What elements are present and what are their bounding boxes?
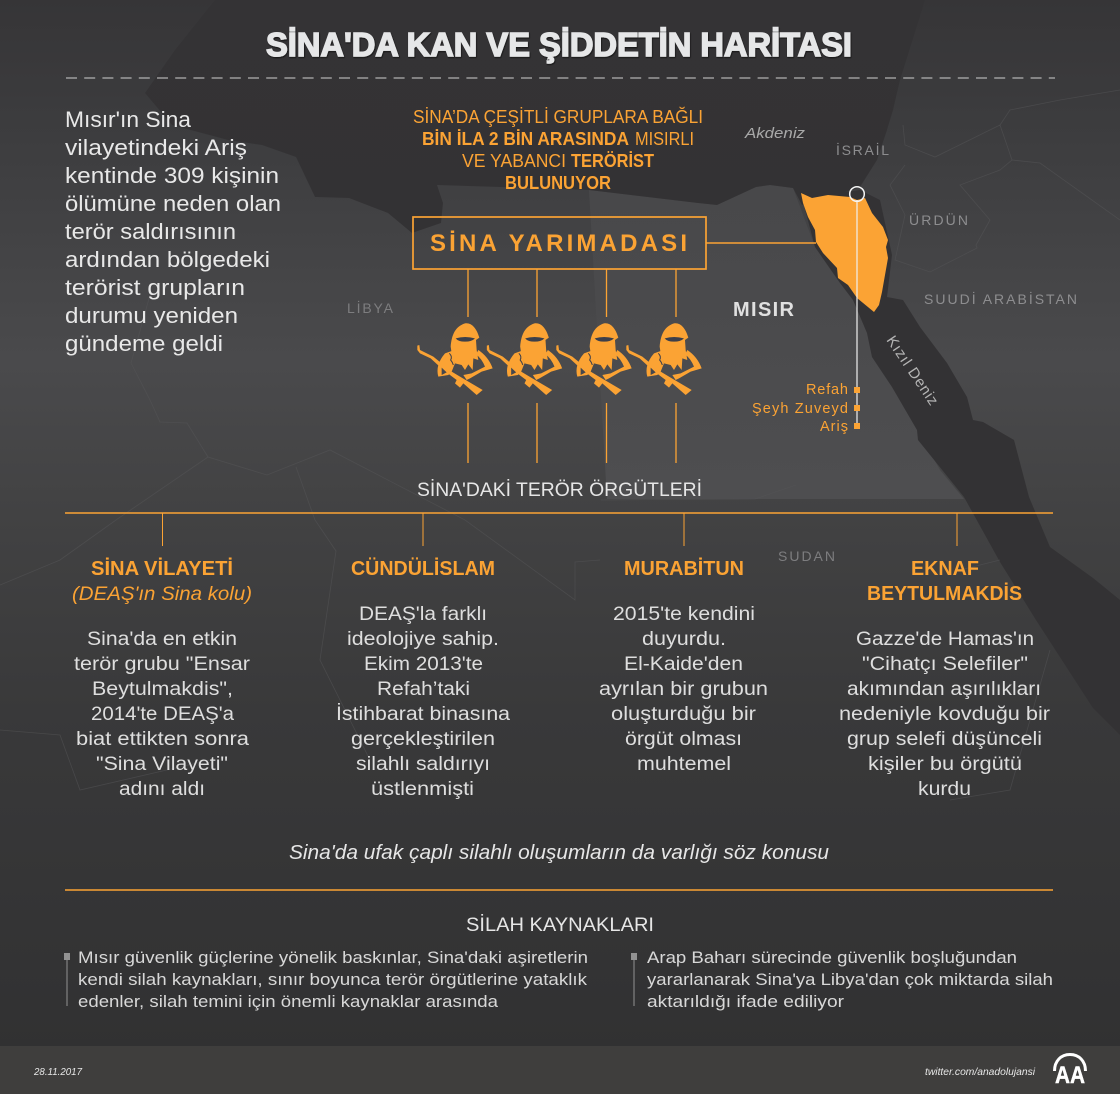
org timeline rule <box>65 513 1053 546</box>
map labels: İSRAİL <box>836 141 889 158</box>
intro paragraph: terörist grupların <box>65 275 245 300</box>
intro paragraph: ardından bölgedeki <box>65 247 270 272</box>
column: Sina Vilayeti: "Sina Vilayeti" <box>96 754 228 775</box>
column: Eknaf Beytulmakdis: nedeniyle kovduğu bir <box>839 704 1051 725</box>
column: Cundulislam <box>336 557 510 800</box>
map labels: SUDAN <box>778 548 835 564</box>
column: Sina Vilayeti: Beytulmakdis", <box>92 679 233 700</box>
column: Eknaf Beytulmakdis: BEYTULMAKDİS <box>867 582 1022 605</box>
column: Murabitun <box>599 557 768 775</box>
column: Murabitun: ayrılan bir grubun <box>599 679 768 700</box>
heading: weapon sources: SİLAH KAYNAKLARI <box>466 915 654 936</box>
column: Eknaf Beytulmakdis: kurdu <box>918 779 971 800</box>
column: Sina Vilayeti: 2014'te DEAŞ'a <box>91 704 234 725</box>
column: Sina Vilayeti: adını aldı <box>119 779 205 800</box>
twitter handle: twitter.com/anadolujansi <box>925 1066 1036 1078</box>
weapon source note left: Mısır güvenlik güçlerine yönelik baskınlar, Sina'daki aşiretlerin <box>78 948 588 967</box>
column: Eknaf Beytulmakdis: akımından aşırılıkları <box>847 679 1041 700</box>
icon: Anadolu Agency logo <box>1054 1054 1086 1089</box>
column: Murabitun: El-Kaide'den <box>624 654 743 675</box>
weapon source note right: Arap Baharı sürecinde güvenlik boşluğundan <box>647 948 1017 967</box>
locator pin and city list: Şeyh Zuveyd <box>752 401 848 417</box>
locator pin and city list: Refah <box>806 382 848 398</box>
map labels: ÜRDÜN <box>909 211 968 228</box>
column: Eknaf Beytulmakdis: EKNAF <box>911 558 979 580</box>
column: Eknaf Beytulmakdis <box>839 558 1051 800</box>
intro paragraph: ölümüne neden olan <box>65 191 281 216</box>
column: Cundulislam: üstlenmişti <box>371 779 474 800</box>
icons: four armed militants <box>417 323 702 395</box>
intro paragraph: kentinde 309 kişinin <box>65 163 279 188</box>
icon: Anadolu Agency logo: AA <box>1055 1062 1085 1089</box>
connector line box to Sinai <box>706 242 816 244</box>
date: 28.11.2017 <box>33 1066 83 1078</box>
Sinai peninsula map shape <box>801 193 888 312</box>
column: Sina Vilayeti <box>72 557 252 800</box>
column: Eknaf Beytulmakdis: "Cihatçı Selefiler" <box>862 654 1028 675</box>
column: Murabitun: duyurdu. <box>642 629 726 650</box>
column: Eknaf Beytulmakdis: Gazze'de Hamas'ın <box>856 629 1034 650</box>
locator pin and city list: Ariş <box>820 419 848 435</box>
column: Murabitun: MURABİTUN <box>624 557 744 580</box>
column: Eknaf Beytulmakdis: grup selefi düşünceli <box>847 729 1042 750</box>
column: Murabitun: muhtemel <box>637 754 731 775</box>
column: Cundulislam: Refah’taki <box>377 679 470 700</box>
map labels <box>347 126 1077 564</box>
heading: terror organizations: SİNA'DAKİ TERÖR ÖRGÜTLERİ <box>417 478 702 501</box>
intro paragraph <box>65 107 281 356</box>
column: Murabitun: örgüt olması <box>625 729 742 750</box>
intro paragraph: vilayetindeki Ariş <box>65 135 247 160</box>
Sina Yarimadasi box <box>413 217 706 269</box>
map labels: Kızıl Deniz <box>883 333 942 409</box>
connector lines to gunmen <box>468 269 676 463</box>
country borders <box>0 90 1120 800</box>
Sina Yarimadasi box: SİNA YARIMADASI <box>430 230 687 257</box>
column: Cundulislam: gerçekleştirilen <box>351 729 495 750</box>
italic note: Sina'da ufak çaplı silahlı oluşumların da varlığı söz konusu <box>289 842 829 864</box>
column: Eknaf Beytulmakdis: kişiler bu örgütü <box>868 754 1022 775</box>
intro paragraph: terör saldırısının <box>65 219 236 244</box>
weapon source note right: aktarıldığı ifade ediliyor <box>647 992 844 1011</box>
column: Sina Vilayeti: Sina'da en etkin <box>87 629 237 650</box>
title: SİNA'DA KAN VE ŞİDDETİN HARİTASI <box>266 27 852 64</box>
Mediterranean sea <box>145 0 925 233</box>
column: Murabitun: oluşturduğu bir <box>611 704 757 725</box>
map labels: Akdeniz <box>744 126 806 142</box>
column: Sina Vilayeti: (DEAŞ'ın Sina kolu) <box>72 584 252 605</box>
intro paragraph: Mısır'ın Sina <box>65 107 191 132</box>
weapon source note left: kendi silah kaynakları, sınır boyunca terör örgütlerine yataklık <box>78 970 588 989</box>
weapon source note right: yararlanarak Sina'ya Libya'dan çok miktarda silah <box>647 970 1053 989</box>
intro paragraph: gündeme geldi <box>65 331 223 356</box>
orange callout: number of terrorists: TERÖRİST <box>571 151 654 171</box>
column: Cundulislam: İstihbarat binasına <box>336 704 510 725</box>
orange callout: number of terrorists: MISIRLI <box>635 129 694 149</box>
footer bar <box>0 1046 1120 1094</box>
column: Sina Vilayeti: terör grubu "Ensar <box>74 654 251 675</box>
locator pin and city list <box>752 187 864 435</box>
weapon source note left: edenler, silah temini için önemli kaynaklar arasında <box>78 992 499 1011</box>
map labels: SUUDİ ARABİSTAN <box>924 290 1077 307</box>
map labels: MISIR <box>733 299 795 321</box>
map labels: LİBYA <box>347 299 394 316</box>
Red Sea <box>802 190 1120 735</box>
orange callout: number of terrorists: VE YABANCI <box>462 151 566 171</box>
weapon source note left <box>64 948 588 1011</box>
orange callout: number of terrorists: BİN İLA 2 BİN ARASINDA <box>422 129 629 149</box>
weapon source note right <box>631 948 1053 1011</box>
orange callout: number of terrorists <box>413 106 703 193</box>
column: Murabitun: 2015'te kendini <box>613 604 755 625</box>
orange callout: number of terrorists: SİNA’DA ÇEŞİTLİ GRUPLARA BAĞLI <box>413 106 703 127</box>
column: Cundulislam: Ekim 2013'te <box>364 654 483 675</box>
column: Cundulislam: DEAŞ'la farklı <box>359 604 487 625</box>
column: Sina Vilayeti: SİNA VİLAYETİ <box>91 557 233 580</box>
column: Cundulislam: silahlı saldırıyı <box>356 754 490 775</box>
column: Cundulislam: CÜNDÜLİSLAM <box>351 557 495 580</box>
intro paragraph: durumu yeniden <box>65 303 238 328</box>
orange callout: number of terrorists: BULUNUYOR <box>505 173 611 193</box>
column: Sina Vilayeti: biat ettikten sonra <box>76 729 249 750</box>
column: Cundulislam: ideolojiye sahip. <box>347 629 499 650</box>
